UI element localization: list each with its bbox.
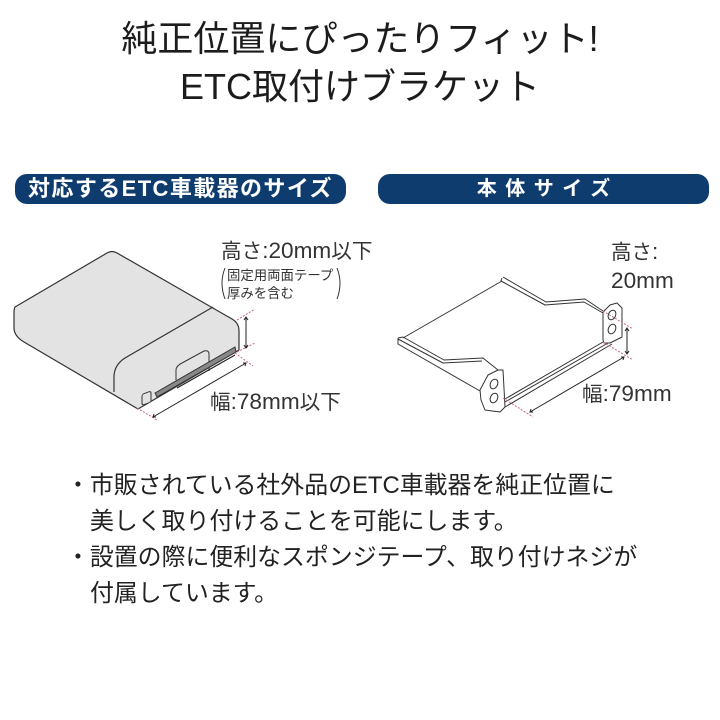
bullet list: ・市販されている社外品のETC車載器を純正位置に (66, 472, 615, 499)
note: includes tape thickness: 固定用両面テープ (227, 268, 333, 283)
panel: compatible ETC unit size (13, 174, 372, 420)
bullet list: 付属しています。 (90, 580, 278, 607)
note: includes tape thickness (222, 268, 340, 301)
label: width: 幅:79mm (582, 381, 672, 406)
label: height (611, 239, 674, 293)
heading: bracket size: 本体サイズ (477, 178, 619, 200)
label: width: 幅:78mm以下 (210, 389, 341, 414)
heading: bracket size (378, 174, 709, 204)
bullet list: 美しく取り付けることを可能にします。 (90, 508, 518, 535)
diagram: ETC unit (13, 250, 256, 420)
bullet list: ・設置の際に便利なスポンジテープ、取り付けネジが (66, 544, 637, 571)
label: height: 高さ: (611, 239, 658, 264)
heading: compatible ETC unit size: 対応するETC車載器のサイズ (28, 176, 333, 201)
diagram: bracket (398, 276, 632, 418)
title: ETC取付けブラケット (180, 66, 540, 107)
note: includes tape thickness: 厚みを含む (227, 286, 294, 301)
label: height: 20mm (611, 268, 674, 293)
bracket outline (398, 277, 622, 412)
bullet list (66, 472, 637, 607)
title: 純正位置にぴったりフィット! (121, 18, 599, 59)
label: height: 高さ:20mm以下 (221, 238, 372, 263)
dimension lines (137, 309, 255, 420)
panel: bracket size (378, 174, 709, 418)
unit body (14, 252, 239, 409)
title (121, 18, 599, 107)
dimension lines (503, 311, 633, 417)
